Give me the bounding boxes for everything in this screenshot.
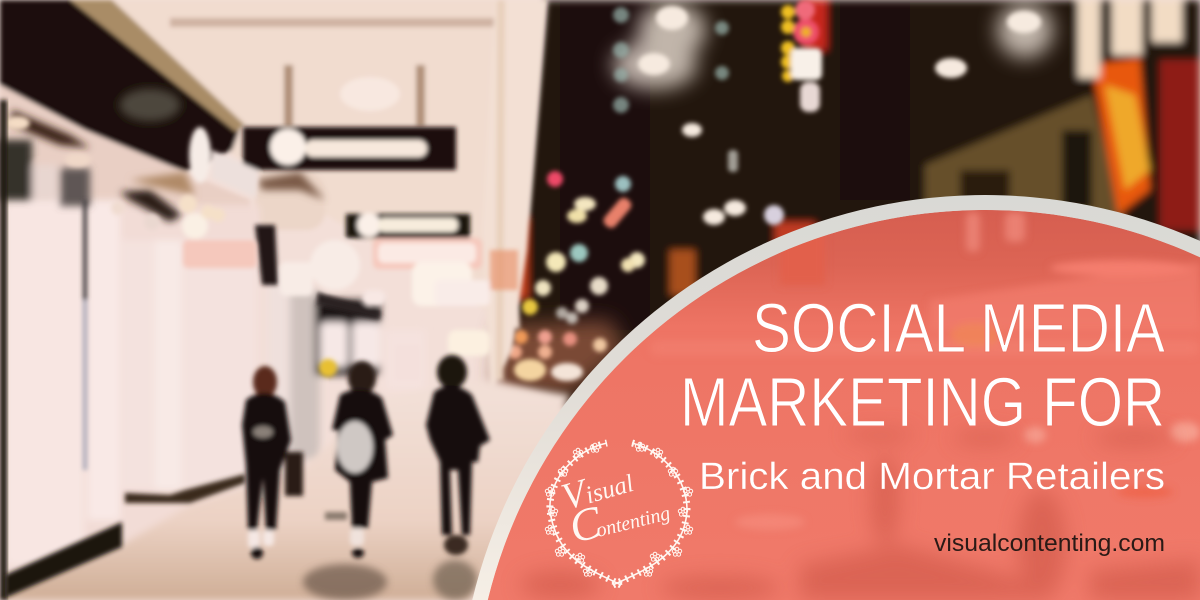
awning shadow: [258, 172, 325, 200]
icon: Visual Contenting wreath logo: [545, 442, 693, 585]
icon: Visual Contenting wreath logo: Contenting: [564, 479, 674, 553]
wall lights and dark details: [0, 110, 195, 222]
warm glow above the street: [495, 320, 625, 395]
icon: sign lights: [781, 0, 822, 112]
panel: bright signs: [111, 127, 518, 380]
dark reflections in the street: [520, 429, 1200, 600]
ring: white circle outline: [472, 195, 1200, 600]
panel: night buildings: [505, 0, 1200, 600]
icon: Visual Contenting wreath logo: Visual: [557, 458, 638, 519]
panel: floor: [0, 100, 570, 600]
panel: shop ceiling: [0, 0, 547, 395]
title: [680, 289, 1165, 441]
subtitle: Brick and Mortar Retailers: [699, 456, 1165, 498]
person middle: [325, 361, 393, 558]
person left: [242, 366, 303, 559]
window mullions and lamps: [6, 116, 278, 470]
website url: visualcontenting.com: [934, 530, 1165, 557]
people silhouettes: [242, 355, 490, 559]
person right: [426, 355, 490, 555]
panel: coral circle: [488, 210, 1200, 600]
street lamps and bokeh: [496, 2, 1053, 381]
panel: shop windows: [0, 195, 425, 570]
